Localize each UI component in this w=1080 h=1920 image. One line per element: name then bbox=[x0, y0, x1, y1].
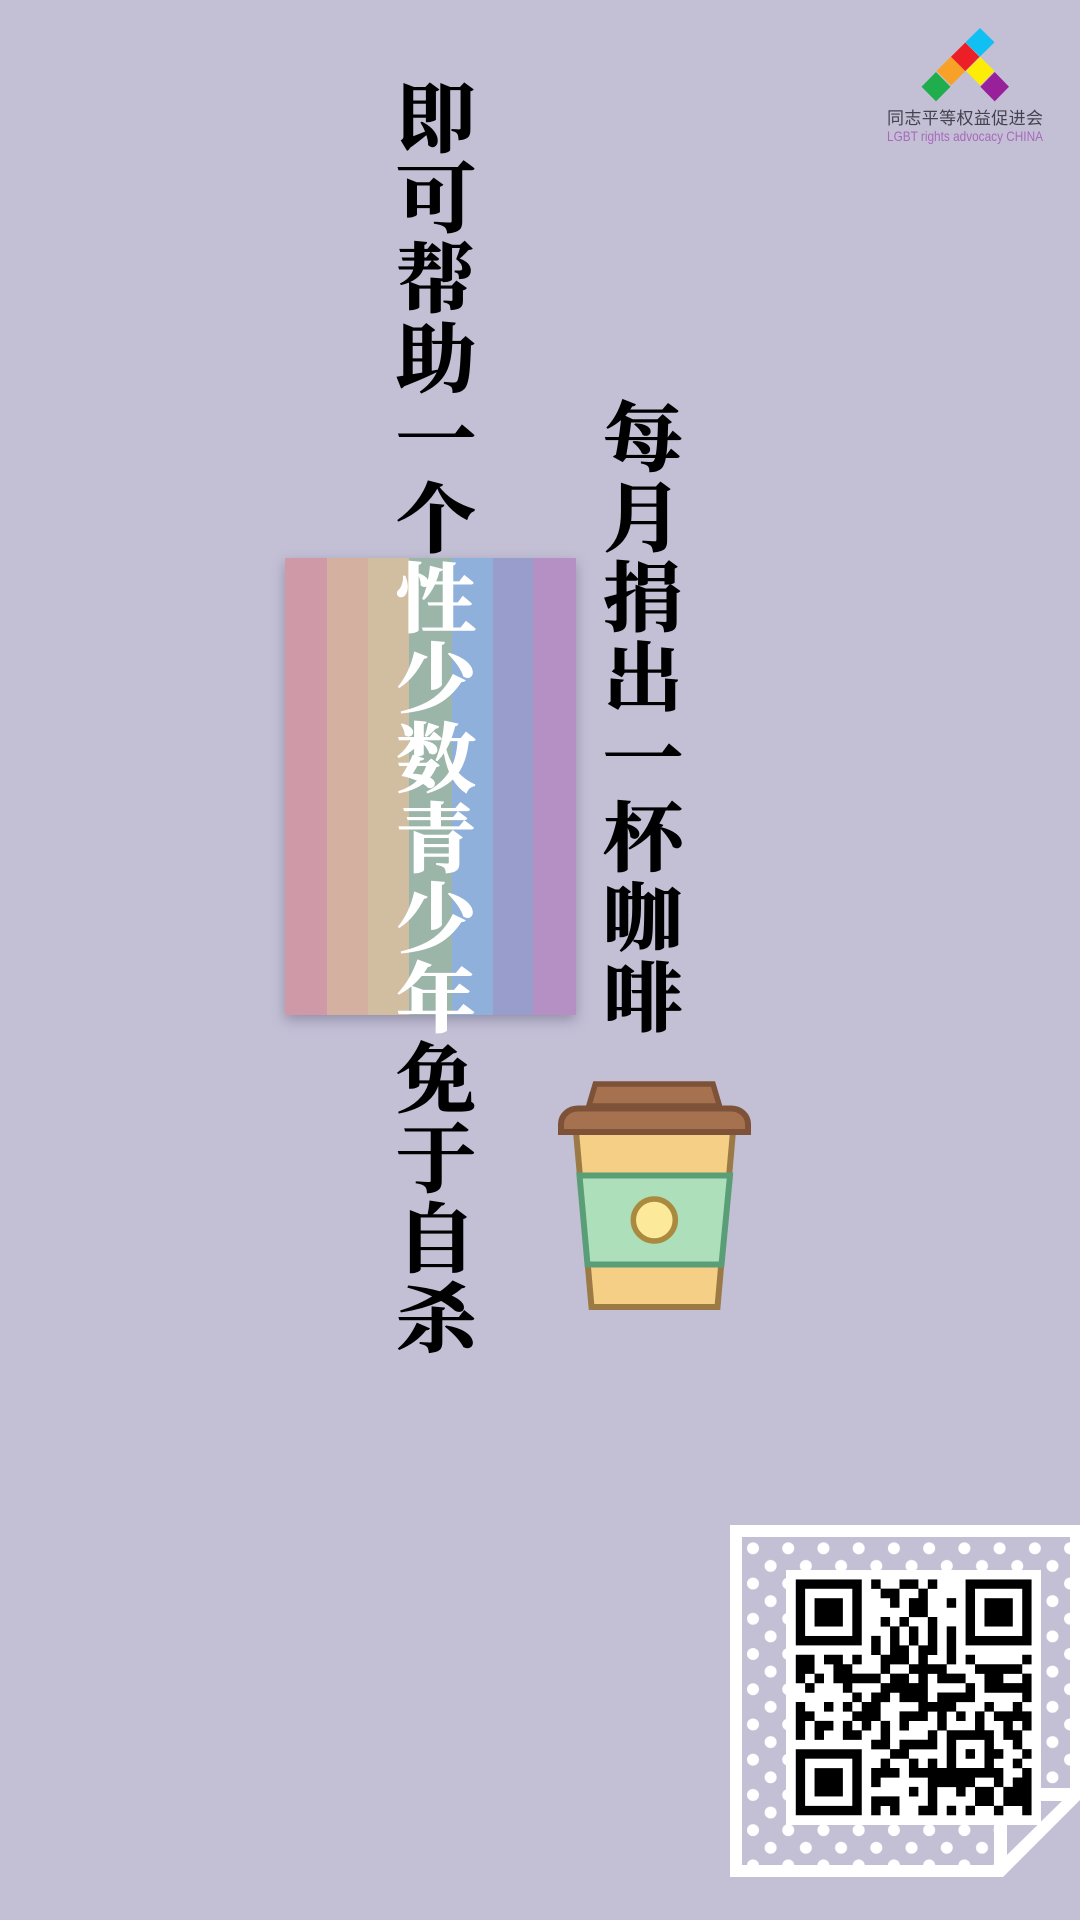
panel: rainbow flag bbox=[285, 558, 576, 1015]
QR code bbox=[796, 1579, 1032, 1816]
logo: LGBT rights advocacy China bbox=[887, 28, 1044, 144]
heading: right vertical text: 每月捐出一杯咖啡 bbox=[591, 398, 679, 1038]
heading: left vertical text: 即可帮助一个 性少数青少年 免于自杀 bbox=[384, 79, 472, 1359]
icon: rainbow diamonds bbox=[922, 28, 1009, 101]
logo text: Chinese name: 同志平等权益促进会 bbox=[887, 109, 1043, 128]
